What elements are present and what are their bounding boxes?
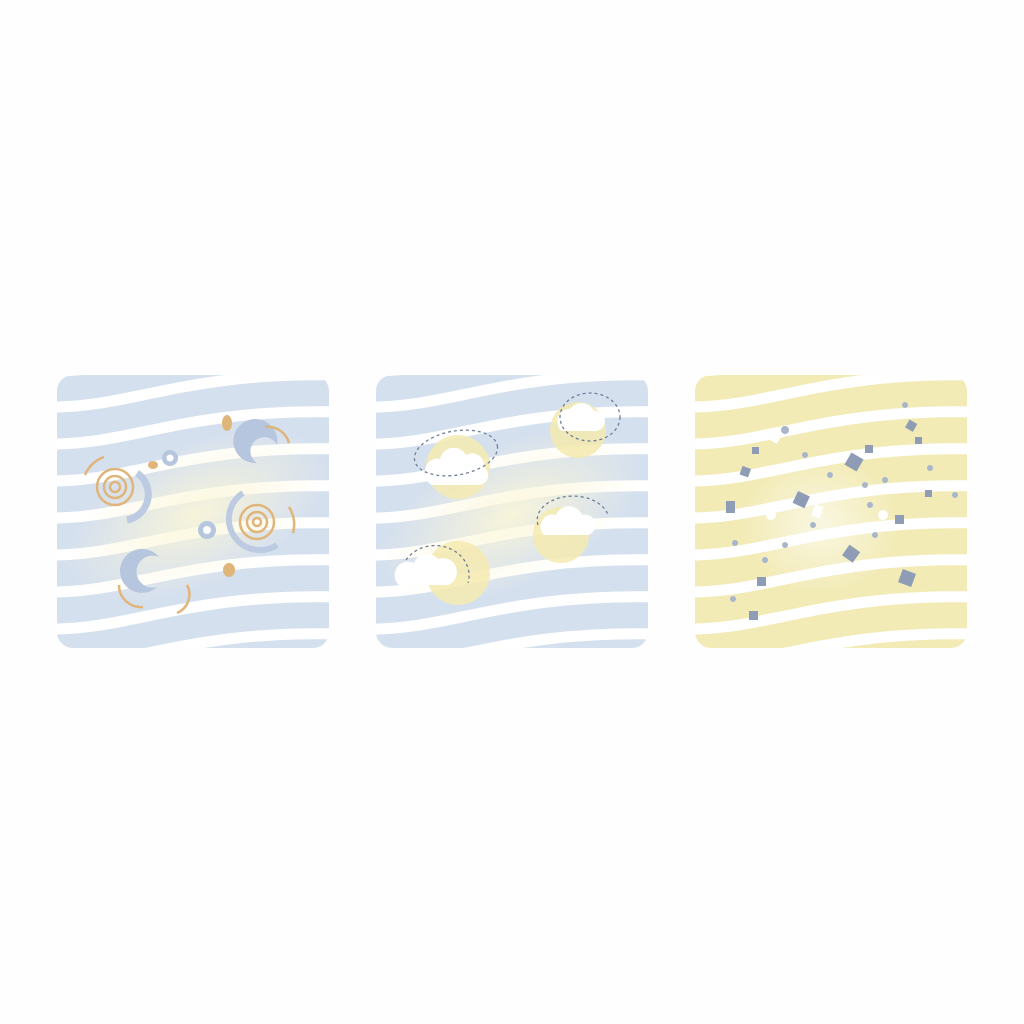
panel: clouds [376,375,648,648]
icon: swirl right [240,505,294,539]
panel: swirls [57,375,329,648]
icon: crescents [233,419,277,463]
panel: crystals [695,375,967,648]
icon: crystals [726,420,932,620]
icon: clouds [395,403,605,587]
icon: swirl left [85,457,133,505]
